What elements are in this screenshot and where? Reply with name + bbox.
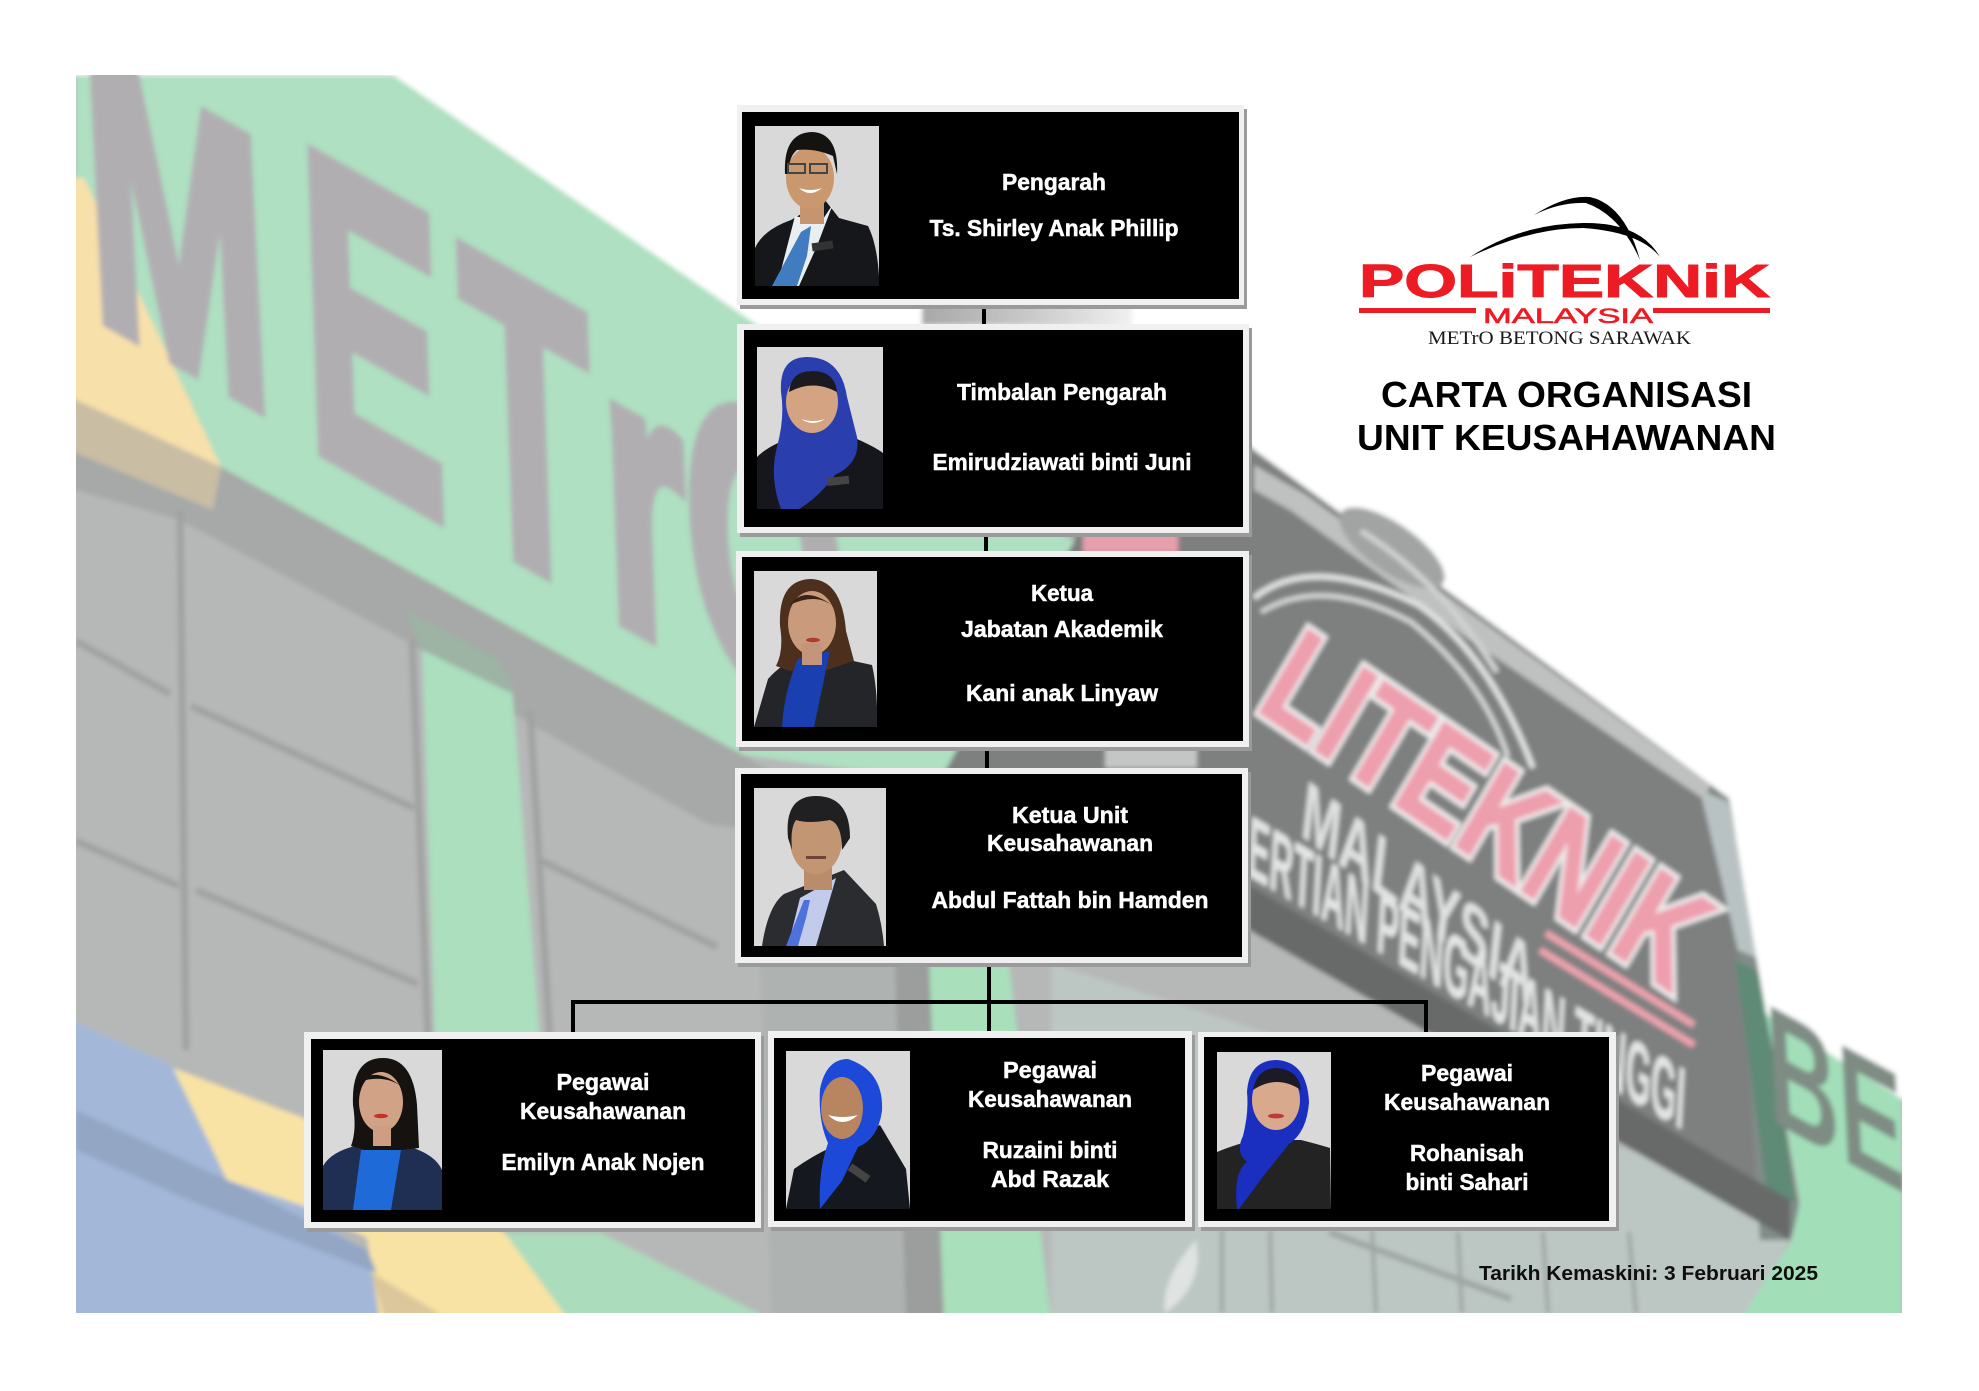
role and name text [930, 169, 1178, 241]
background photo: building facade: MALAYSIA [1298, 762, 1539, 1025]
role and name text [968, 1057, 1132, 1192]
red rule left [1359, 308, 1476, 313]
role and name text: Ruzaini binti [982, 1137, 1118, 1163]
photo: Kani [754, 571, 877, 727]
role and name text: binti Sahari [1406, 1169, 1528, 1195]
role and name text: Timbalan Pengarah [957, 379, 1167, 405]
title: CARTA ORGANISASI [1381, 374, 1752, 415]
role and name text: Pegawai [1421, 1060, 1513, 1086]
photo: Ruzaini [786, 1051, 910, 1209]
role and name text: Pegawai [1003, 1057, 1097, 1083]
role and name text: Emirudziawati binti Juni [932, 449, 1192, 475]
footer: update date: Tarikh Kemaskini: 3 Februari 2025 [1479, 1263, 1818, 1285]
red rule right [1653, 308, 1770, 313]
connector lines [571, 305, 1428, 1040]
background photo: building facade: O [676, 291, 857, 820]
background photo: building facade: r [594, 251, 694, 744]
subtitle: MALAYSIA [1483, 305, 1653, 328]
background photo: building facade: LITEKNIK [1239, 601, 1735, 1018]
photo: Rohanisah [1217, 1052, 1331, 1209]
panel: Pengarah [737, 105, 1247, 309]
title [1357, 374, 1776, 458]
role and name text: Keusahawanan [1384, 1089, 1550, 1115]
role and name text: Ketua [1031, 580, 1093, 606]
role and name text [961, 580, 1163, 706]
role and name text: Keusahawanan [968, 1086, 1132, 1112]
panel: Ketua Unit Keusahawanan [735, 768, 1251, 967]
background photo: building facade: E [294, 53, 451, 613]
role and name text: Jabatan Akademik [961, 616, 1163, 642]
panel: Pegawai Ruzaini [768, 1031, 1195, 1231]
role and name text: Pegawai [556, 1069, 650, 1095]
role and name text: Ts. Shirley Anak Phillip [930, 215, 1178, 241]
campus name: METrO BETONG SARAWAK [1428, 328, 1691, 349]
role and name text: Pengarah [1002, 169, 1106, 195]
panel: Ketua Jabatan Akademik [736, 551, 1252, 751]
role and name text: Kani anak Linyaw [966, 680, 1158, 706]
panel: Timbalan Pengarah [737, 324, 1252, 537]
role and name text: Emilyn Anak Nojen [502, 1149, 704, 1175]
background photo: building facade: BE [1762, 965, 1909, 1232]
panel: Pegawai Rohanisah [1198, 1032, 1619, 1231]
background photo: building facade: LITEKNIK [1239, 601, 1735, 1018]
role and name text [502, 1069, 704, 1175]
role and name text: Keusahawanan [987, 830, 1153, 856]
role and name text: Abdul Fattah bin Hamden [932, 887, 1208, 913]
wordmark: POLiTEKNiK [1359, 255, 1770, 307]
background photo: building facade: ERTIAN PENGAJIAN TINGGI [1246, 797, 1688, 1150]
icon: black swoosh [1470, 197, 1660, 260]
background photo: building facade: T [454, 158, 599, 689]
photo: Emilyn [323, 1050, 442, 1210]
logo: Politeknik Malaysia [1359, 197, 1770, 349]
role and name text: Keusahawanan [520, 1098, 686, 1124]
role and name text [932, 802, 1208, 913]
role and name text: Abd Razak [991, 1166, 1109, 1192]
panel: Pegawai Emilyn [304, 1032, 764, 1232]
photo: Abdul Fattah [754, 788, 886, 946]
role and name text [1384, 1060, 1550, 1195]
role and name text: Ketua Unit [1012, 802, 1128, 828]
photo: Emirudziawati [757, 347, 883, 509]
role and name text [932, 379, 1192, 475]
title: UNIT KEUSAHAWANAN [1357, 417, 1776, 458]
photo: Shirley [755, 126, 879, 286]
role and name text: Rohanisah [1410, 1140, 1524, 1166]
